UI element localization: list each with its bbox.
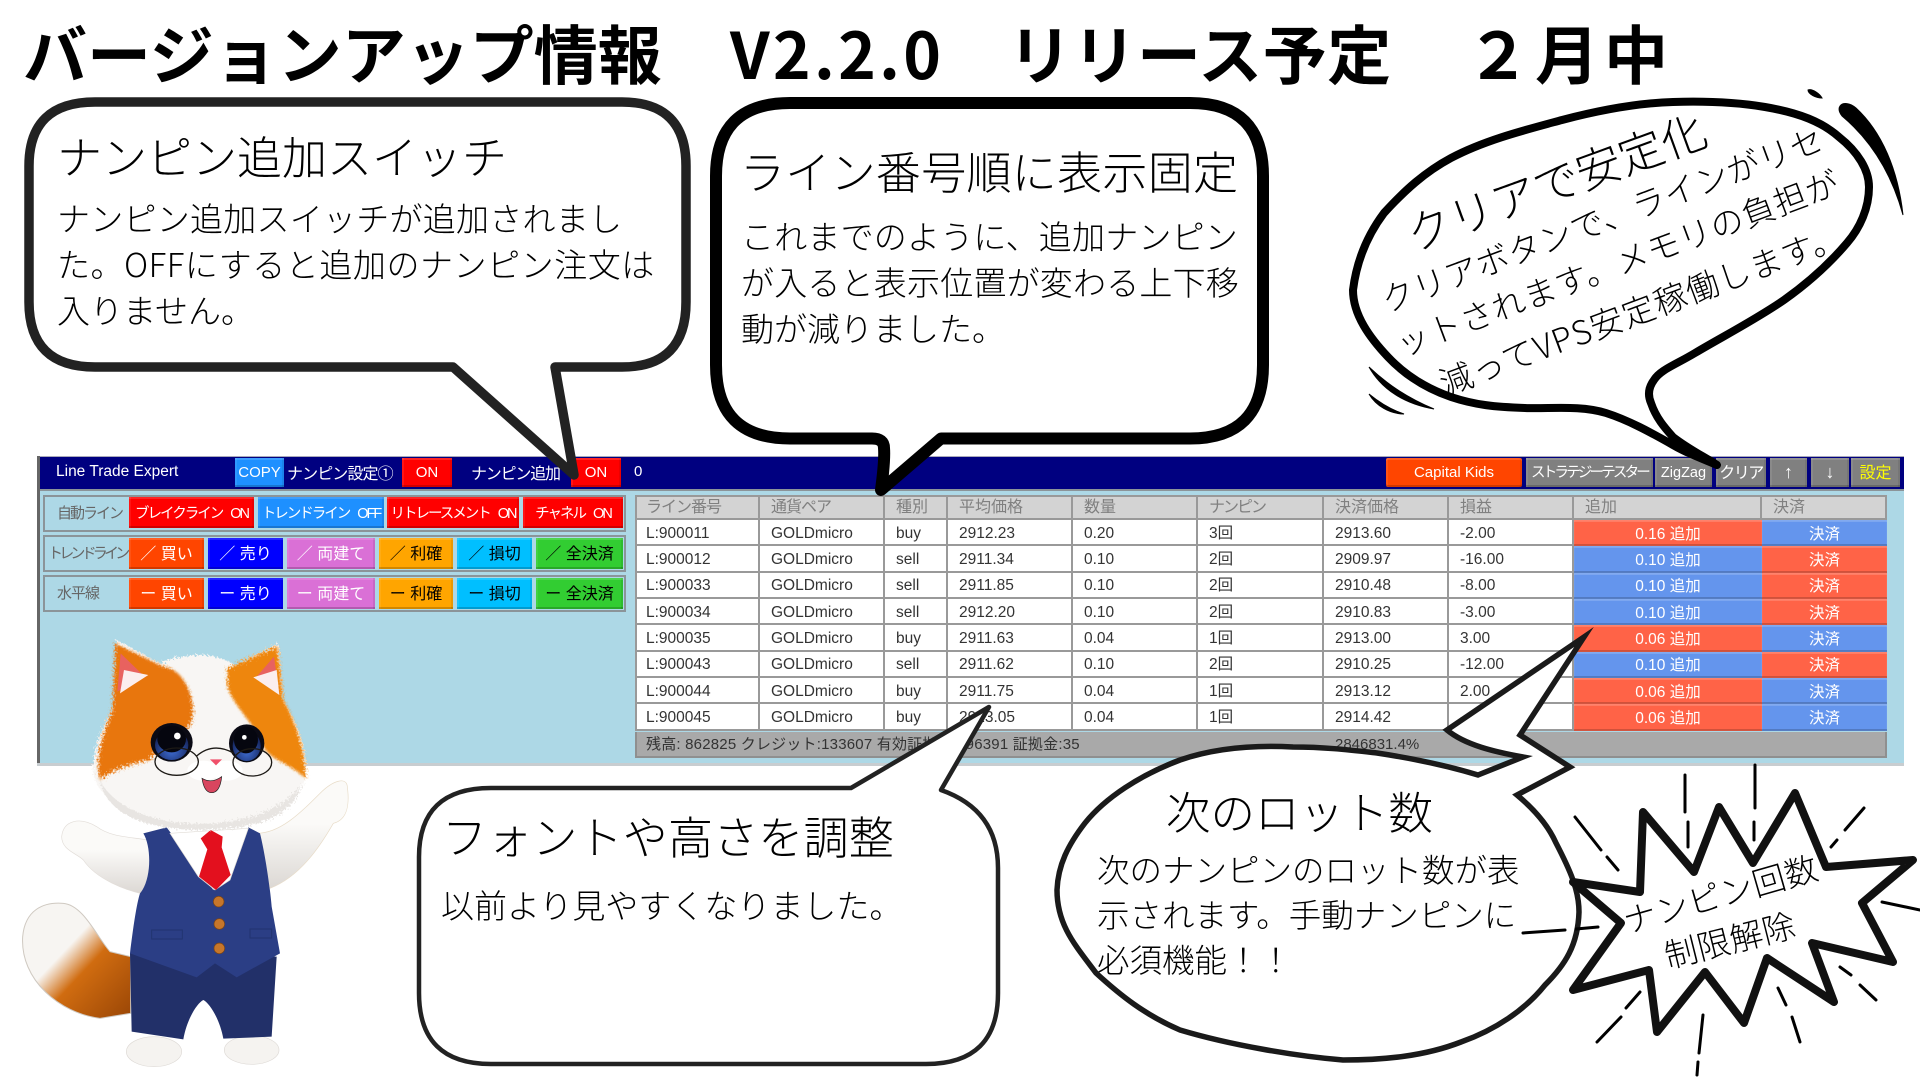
- table: open positions: 2911.75: [959, 683, 1014, 700]
- table: open positions: -3.00: [1460, 604, 1495, 621]
- button: close all: ー 全決済: [545, 586, 614, 603]
- settings button: 設定: [1859, 465, 1892, 482]
- callout: next lot size: 次のロット数: [1166, 777, 1433, 842]
- table: open positions: GOLDmicro: [771, 656, 853, 673]
- table: open positions: 1回: [1209, 709, 1233, 726]
- group: trend line orders: [43, 535, 626, 572]
- eye left: [151, 723, 193, 762]
- table: open positions: GOLDmicro: [771, 683, 853, 700]
- label: trend line: トレンドライン: [48, 545, 126, 562]
- callout: averaging add switch: [29, 102, 686, 475]
- feet: [126, 1036, 279, 1067]
- callout: averaging add switch: た。OFFにすると追加のナンピン注文は: [57, 239, 655, 287]
- table: open positions: L:900012: [646, 551, 711, 568]
- callout: line number order: [716, 103, 1263, 490]
- button: break line: [129, 497, 254, 528]
- accent strokes: [1369, 90, 1903, 414]
- callout: line number order: 動が減りました。: [741, 303, 1005, 351]
- button: trend line: トレンドライン OFF: [262, 506, 380, 522]
- table: open positions: L:900044: [646, 683, 711, 700]
- group: auto lines: [43, 495, 626, 532]
- starburst: averaging limit removed: ナンピン回数: [1617, 842, 1823, 943]
- table: open positions: 決済: [1809, 605, 1840, 622]
- table: open positions: L:900043: [646, 656, 711, 673]
- button: buy: ／ 買い: [140, 546, 193, 563]
- head: [93, 640, 306, 830]
- label: averaging setting: ナンピン設定①: [287, 466, 393, 483]
- table: open positions: 0.10: [1084, 656, 1114, 673]
- table: open positions: sell: [896, 656, 919, 673]
- clear button: [1716, 458, 1766, 487]
- table: open positions: [635, 495, 1887, 731]
- callout: next lot size: 示されます。手動ナンピンに: [1097, 890, 1516, 937]
- button: stop loss: [457, 578, 532, 609]
- table: open positions: ナンピン: [1209, 498, 1265, 516]
- button: take profit: ／ 利確: [390, 546, 442, 563]
- button: take profit: [379, 538, 453, 569]
- toolbar title: Line Trade Expert: [56, 463, 178, 480]
- up button: [1770, 458, 1807, 487]
- COPY button: COPY: [238, 464, 281, 481]
- pockets: [152, 929, 272, 939]
- table: open positions: 決済: [1809, 578, 1840, 595]
- table: open positions: 0.10: [1084, 551, 1114, 568]
- table: open positions: GOLDmicro: [771, 577, 853, 594]
- table: open positions: 1回: [1209, 630, 1233, 647]
- table: open positions: 通貨ペア: [771, 498, 831, 516]
- button: trend line: [258, 497, 384, 528]
- table: open positions: 2911.34: [959, 551, 1014, 568]
- title: V2.2.0: [730, 6, 944, 98]
- table: open positions: 2912.20: [959, 604, 1015, 621]
- table: open positions: -2.00: [1460, 525, 1495, 542]
- table: open positions: 1回: [1209, 683, 1233, 700]
- table: open positions: L:900033: [646, 577, 711, 594]
- table: open positions: 0.04: [1084, 683, 1114, 700]
- table: open positions: buy: [896, 525, 921, 542]
- callout: next lot size: [1057, 637, 1584, 1060]
- title: バージョンアップ情報: [23, 6, 662, 98]
- table: open positions: L:900011: [646, 525, 710, 542]
- table: open positions: 決済: [1773, 498, 1805, 516]
- table: open positions: 2911.62: [959, 656, 1014, 673]
- ON button: setting: [402, 458, 452, 487]
- table: open positions: -8.00: [1460, 577, 1495, 594]
- table: open positions: 決済: [1809, 526, 1840, 543]
- ON button: add: ON: [585, 464, 607, 481]
- table: open positions: L:900045: [646, 709, 711, 726]
- table: open positions: GOLDmicro: [771, 604, 853, 621]
- trousers: [130, 953, 277, 1039]
- table: open positions: 2911.85: [959, 577, 1014, 594]
- button: close all: [536, 538, 623, 569]
- callout: line number order: これまでのように、追加ナンピン: [741, 211, 1238, 259]
- vest buttons: [213, 896, 225, 954]
- table: open positions: 平均価格: [959, 498, 1023, 516]
- title: [23, 6, 1673, 98]
- button: both: ／ 両建て: [297, 546, 365, 563]
- table: open positions: 2913.00: [1335, 630, 1391, 647]
- table: open positions: 決済: [1809, 684, 1840, 701]
- muzzle: [187, 761, 243, 781]
- callout: next lot size: 必須機能！！: [1097, 935, 1292, 982]
- table: open positions: buy: [896, 709, 921, 726]
- table: open positions: -12.00: [1460, 656, 1504, 673]
- table: open positions: 3.00: [1460, 630, 1490, 647]
- counter value: 0: [634, 463, 642, 480]
- COPY button: [235, 458, 284, 487]
- table: open positions: 損益: [1460, 498, 1492, 516]
- table: open positions: GOLDmicro: [771, 551, 853, 568]
- table: open positions: buy: [896, 683, 921, 700]
- callout: line number order: ライン番号順に表示固定: [740, 137, 1238, 202]
- down button: ↓: [1826, 462, 1834, 482]
- group: horizontal line orders: [43, 575, 626, 612]
- button: take profit: [379, 578, 453, 609]
- table: open positions: sell: [896, 604, 919, 621]
- ZigZag button: [1655, 458, 1712, 487]
- clear button: クリア: [1719, 465, 1763, 482]
- table: open positions: 0.10 追加: [1635, 552, 1701, 569]
- table: open positions: 0.16 追加: [1635, 526, 1701, 543]
- account summary bar: 2846831.4%: [1335, 736, 1419, 753]
- nose: [210, 759, 222, 765]
- table: open positions: GOLDmicro: [771, 709, 853, 726]
- account summary bar: 残高: 862825 クレジット:133607 有効証拠金:996391 証拠金:35: [646, 736, 1080, 753]
- button: sell: ／ 売り: [219, 546, 272, 563]
- table: open positions: 2回: [1209, 551, 1233, 568]
- table: open positions: 0.10 追加: [1635, 578, 1701, 595]
- mouth: [202, 777, 222, 793]
- table: open positions: 0.06 追加: [1635, 684, 1701, 701]
- callout: clear stabilisation: 減ってVPS安定稼働します。: [1432, 210, 1851, 405]
- table: open positions: GOLDmicro: [771, 525, 853, 542]
- callout: averaging add switch: 入りません。: [57, 285, 254, 333]
- table: open positions: 決済: [1809, 657, 1840, 674]
- callout: averaging add switch: ナンピン追加スイッチ: [57, 122, 507, 187]
- ear tufts: [120, 670, 279, 695]
- arm right: [257, 781, 348, 888]
- table: open positions: 2910.25: [1335, 656, 1391, 673]
- button: stop loss: ／ 損切: [468, 546, 521, 563]
- button: both: ー 両建て: [297, 586, 365, 603]
- Capital Kids button: Capital Kids: [1414, 464, 1494, 481]
- necktie: [199, 830, 231, 890]
- table: open positions: 2911.63: [959, 630, 1014, 647]
- button: break line: ブレイクライン ON: [135, 506, 248, 522]
- table: open positions: 決済: [1809, 631, 1840, 648]
- strategy tester button: ストラテジーテスター: [1531, 465, 1648, 481]
- button: sell: ー 売り: [219, 586, 272, 603]
- table: open positions: 0.06 追加: [1635, 710, 1701, 727]
- title: ２月中: [1466, 6, 1673, 98]
- button: channel: [523, 497, 623, 528]
- table: open positions: 2913.05: [959, 709, 1015, 726]
- table: open positions: -16.00: [1460, 551, 1504, 568]
- ears inner: [117, 653, 279, 694]
- button: take profit: ー 利確: [390, 586, 442, 603]
- table: open positions: -: [1460, 709, 1465, 726]
- button: retracement: リトレースメント ON: [390, 506, 516, 522]
- panel: app toolbar: [40, 457, 1904, 489]
- callout: clear stabilisation: クリアで安定化: [1396, 95, 1714, 264]
- button: channel: チャネル ON: [535, 506, 611, 522]
- table: open positions: 種別: [896, 498, 928, 516]
- table: open positions: 3回: [1209, 525, 1233, 542]
- starburst: averaging limit removed: [1523, 765, 1920, 1075]
- table: open positions: 2回: [1209, 604, 1233, 621]
- table: open positions: 0.10: [1084, 604, 1114, 621]
- vest: [130, 827, 280, 977]
- table: open positions: 追加: [1585, 498, 1617, 516]
- table: open positions: 2912.23: [959, 525, 1015, 542]
- tail: [23, 903, 131, 1018]
- button: sell: [208, 578, 283, 609]
- button: buy: [129, 578, 204, 609]
- table: open positions: buy: [896, 630, 921, 647]
- glasses: [155, 748, 272, 776]
- arm left: [62, 821, 152, 893]
- table: open positions: 2909.97: [1335, 551, 1391, 568]
- burst rays: [1523, 765, 1920, 1075]
- table: open positions: GOLDmicro: [771, 630, 853, 647]
- button: both: [287, 578, 375, 609]
- table: open positions: 2914.42: [1335, 709, 1391, 726]
- strategy tester button: [1526, 458, 1653, 487]
- callout: averaging add switch: ナンピン追加スイッチが追加されまし: [57, 193, 622, 241]
- button: buy: ー 買い: [140, 586, 193, 603]
- ZigZag button: ZigZag: [1661, 464, 1706, 480]
- table: open positions: 決済: [1809, 552, 1840, 569]
- label: auto lines: 自動ライン: [57, 505, 122, 522]
- button: retracement: [387, 497, 519, 528]
- table: open positions: 0.10: [1084, 577, 1114, 594]
- callout: clear stabilisation: [1353, 90, 1903, 465]
- button: close all: [536, 578, 623, 609]
- table: open positions: sell: [896, 551, 919, 568]
- table: open positions: 決済: [1809, 710, 1840, 727]
- table: open positions: 2910.83: [1335, 604, 1391, 621]
- table: open positions: L:900035: [646, 630, 711, 647]
- ON button: setting: ON: [416, 464, 438, 481]
- label: averaging add: ナンピン追加: [471, 466, 560, 483]
- table: open positions: 0.10 追加: [1635, 605, 1701, 622]
- table: open positions: 数量: [1084, 498, 1116, 516]
- button: stop loss: [457, 538, 532, 569]
- title: リリース予定: [1008, 6, 1392, 98]
- settings button: [1851, 458, 1900, 487]
- table: open positions: 2910.48: [1335, 577, 1391, 594]
- table: open positions: 2.00: [1460, 683, 1490, 700]
- account summary bar: [635, 732, 1887, 758]
- table: open positions: 2回: [1209, 577, 1233, 594]
- table: open positions: sell: [896, 577, 919, 594]
- button: sell: [208, 538, 283, 569]
- callout: font and height: フォントや高さを調整: [442, 802, 894, 867]
- table: open positions: 2回: [1209, 656, 1233, 673]
- callout: clear stabilisation: ットされます。メモリの負担が: [1389, 157, 1846, 366]
- table: open positions: 0.04: [1084, 630, 1114, 647]
- starburst: averaging limit removed: 制限解除: [1659, 899, 1800, 978]
- eye right: [229, 724, 264, 762]
- callout: font and height: 以前より見やすくなりました。: [441, 880, 902, 928]
- callout: line number order: が入ると表示位置が変わる上下移: [741, 257, 1239, 305]
- Capital Kids button: [1386, 458, 1522, 487]
- ON button: add: [571, 458, 621, 487]
- table: open positions: 2913.12: [1335, 683, 1391, 700]
- up button: ↑: [1784, 462, 1793, 482]
- button: buy: [129, 538, 204, 569]
- table: open positions: L:900034: [646, 604, 711, 621]
- table: open positions: 0.04: [1084, 709, 1114, 726]
- shirt: [170, 828, 248, 890]
- button: stop loss: ー 損切: [468, 586, 521, 603]
- table: open positions: 0.10 追加: [1635, 657, 1701, 674]
- callout: clear stabilisation: クリアボタンで、ラインがリセ: [1374, 113, 1830, 322]
- callout: next lot size: 次のナンピンのロット数が表: [1097, 845, 1520, 892]
- table: open positions: 0.20: [1084, 525, 1114, 542]
- table: open positions: 決済価格: [1335, 498, 1399, 516]
- table: open positions: 0.06 追加: [1635, 631, 1701, 648]
- label: horizontal line: 水平線: [57, 585, 99, 602]
- table: open positions: ライン番号: [646, 498, 721, 516]
- down button: [1811, 458, 1849, 487]
- callout: font and height: [419, 707, 998, 1064]
- mascot: cat in vest: [23, 640, 348, 1067]
- button: close all: ／ 全決済: [545, 546, 614, 563]
- table: open positions: 2913.60: [1335, 525, 1391, 542]
- button: both: [287, 538, 375, 569]
- panel: trading app screenshot: [37, 456, 1904, 766]
